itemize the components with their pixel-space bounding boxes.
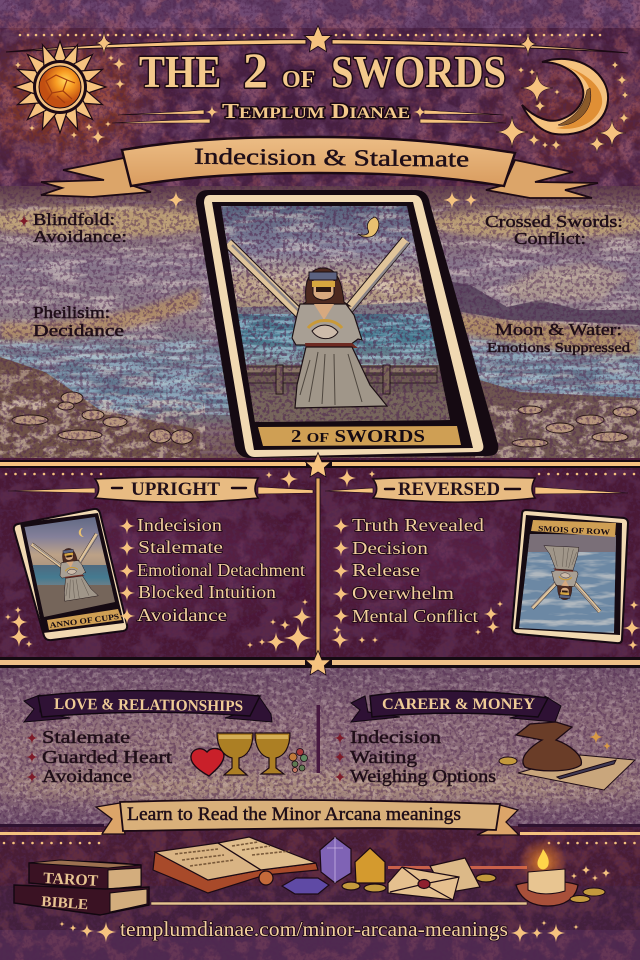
heading banner: Upright: UPRIGHT	[131, 479, 220, 500]
divider with star: upper	[0, 452, 640, 477]
label: Crossed Swords: Crossed Swords:	[485, 212, 623, 231]
upright mini card	[14, 509, 127, 640]
reversed list: Mental Conflict	[352, 606, 478, 626]
icon: Tarot and Bible books: BIBLE	[41, 894, 89, 913]
title: THE	[139, 46, 231, 97]
upright mini card: ANNO OF CUPS	[49, 612, 120, 630]
career list: Indecision	[350, 727, 441, 747]
label: Moon and Water: Moon & Water:	[495, 320, 622, 339]
love list: Guarded Heart	[42, 747, 172, 767]
icon: heart	[191, 748, 224, 776]
icon: coin pouch	[499, 722, 612, 771]
heading banner: Upright	[8, 477, 313, 502]
icon: flowers	[289, 748, 308, 772]
dotted ornaments: footer	[4, 842, 637, 844]
vertical divider	[316, 478, 320, 656]
sparkles around sun	[14, 54, 126, 144]
reversed list	[333, 515, 484, 626]
reversed list: Release	[352, 560, 420, 580]
icon: Tarot and Bible books	[14, 860, 149, 915]
dotted ornaments	[6, 473, 635, 475]
upright list: Indecision	[137, 515, 222, 535]
icon: crescent moon	[522, 59, 608, 134]
icon: crystals and coins	[282, 837, 496, 894]
shelf lines	[151, 866, 527, 905]
title: 2	[243, 42, 280, 98]
label: Pheilisim: Decidance	[33, 321, 124, 340]
banner: Learn to Read: Learn to Read the Minor Arcana meanings	[127, 804, 461, 825]
ribbon: Indecision & Stalemate	[41, 137, 598, 198]
title: SWORDS	[331, 46, 506, 97]
career list: Waiting	[350, 747, 417, 767]
sparkles around moon	[496, 60, 630, 153]
label: Blindfold	[18, 210, 127, 246]
label: Crossed Swords: Conflict:	[514, 229, 586, 248]
upright list: Stalemate	[138, 537, 223, 557]
subtitle: Templum Dianae	[112, 99, 506, 123]
top ornament line	[6, 26, 628, 56]
banner: Learn to Read	[0, 800, 640, 835]
reversed list: Truth Revealed	[352, 515, 484, 535]
icon: paper and pen	[518, 755, 635, 790]
sparkles by ribbon	[167, 191, 478, 209]
label: Pheilisim: Pheilisim:	[33, 303, 110, 322]
main tarot card	[196, 190, 498, 458]
subtitle: Templum Dianae: TEMPLUM D IANAE	[222, 99, 410, 123]
label: Moon and Water: Emotions Suppressed	[487, 340, 630, 355]
icon: open book	[153, 837, 318, 893]
banner: Career and Money	[351, 691, 561, 722]
heading banner: Reversed	[325, 477, 628, 502]
love list: Stalemate	[42, 727, 130, 747]
website link: templumdianae.com/minor-arcana-meanings	[120, 917, 508, 941]
upright list: Emotional Detachment	[137, 560, 305, 580]
icon: candle	[516, 838, 611, 906]
ribbon: Indecision & Stalemate: Indecision & Stalemate	[194, 144, 469, 172]
website link	[59, 917, 579, 942]
banner: Career and Money: CAREER & MONEY	[382, 696, 535, 713]
icon: sun	[14, 41, 106, 133]
upright list	[119, 515, 305, 625]
icon: Tarot and Bible books: TAROT	[43, 870, 99, 890]
banner: Love and Relationships	[24, 691, 272, 722]
heading banner: Reversed: REVERSED	[398, 479, 500, 500]
love list: Avoidance	[42, 766, 132, 786]
reversed list: Overwhelm	[352, 583, 454, 603]
sparkle clusters	[4, 468, 640, 652]
card illustration	[215, 204, 455, 425]
banner: Love and Relationships: LOVE & RELATIONSHIPS	[54, 696, 243, 715]
love list	[26, 727, 172, 786]
title	[139, 42, 506, 98]
reversed mini card: SMOIS OF ROW	[538, 524, 610, 537]
career list: Weighing Options	[350, 766, 496, 786]
label: Blindfold: Avoidance:	[33, 227, 127, 246]
label: Blindfold: Blindfold:	[33, 210, 115, 229]
title: OF	[282, 67, 320, 93]
reversed mini card	[512, 510, 628, 643]
upright list: Blocked Intuition	[138, 582, 276, 602]
label: Crossed Swords	[485, 212, 623, 248]
label: Moon and Water	[487, 320, 630, 355]
reversed list: Decision	[352, 538, 428, 558]
divider with star: lower	[0, 650, 640, 675]
label: Pheilisim	[33, 303, 124, 340]
main tarot card: 2 OF SWORDS	[291, 426, 425, 446]
icon: two goblets	[217, 733, 290, 775]
central divider	[316, 705, 320, 773]
upright list: Avoidance	[137, 605, 227, 625]
career list	[334, 727, 496, 786]
icon: sealed envelope	[388, 858, 480, 900]
